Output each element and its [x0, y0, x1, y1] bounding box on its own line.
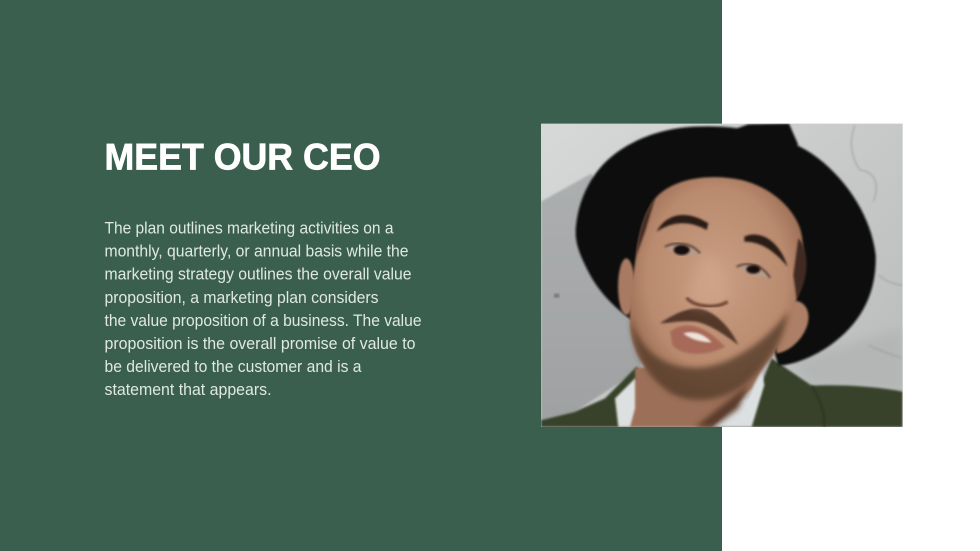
neck: [629, 366, 763, 427]
text block: CEO description: monthly, quarterly, or annual basis while the: [104, 243, 408, 261]
text block: CEO description: marketing strategy outlines the overall value: [104, 266, 412, 284]
jacket: [541, 358, 903, 427]
eyes: [666, 244, 698, 255]
shirt: [615, 371, 764, 427]
eyebrows: [657, 215, 708, 232]
moustache: [660, 309, 738, 345]
ears: [618, 258, 635, 315]
text block: CEO description: the value proposition of a business. The value: [104, 312, 422, 330]
beard: [631, 312, 788, 400]
text block: CEO description: be delivered to the customer and is a: [104, 358, 362, 376]
text block: CEO description: proposition is the overall promise of value to: [104, 335, 416, 353]
text block: CEO description: The plan outlines marketing activities on a: [104, 220, 394, 238]
mouth: [670, 325, 725, 354]
hat: [576, 124, 876, 366]
portrait photo of CEO: [541, 124, 903, 427]
text block: CEO description: statement that appears.: [104, 381, 272, 399]
text block: CEO description: [104, 220, 422, 399]
face: [630, 177, 803, 400]
text block: CEO description: proposition, a marketing plan considers: [104, 289, 378, 307]
nose: [693, 288, 708, 314]
title: MEET OUR CEO: [104, 136, 380, 178]
panel: green background: [0, 0, 722, 551]
